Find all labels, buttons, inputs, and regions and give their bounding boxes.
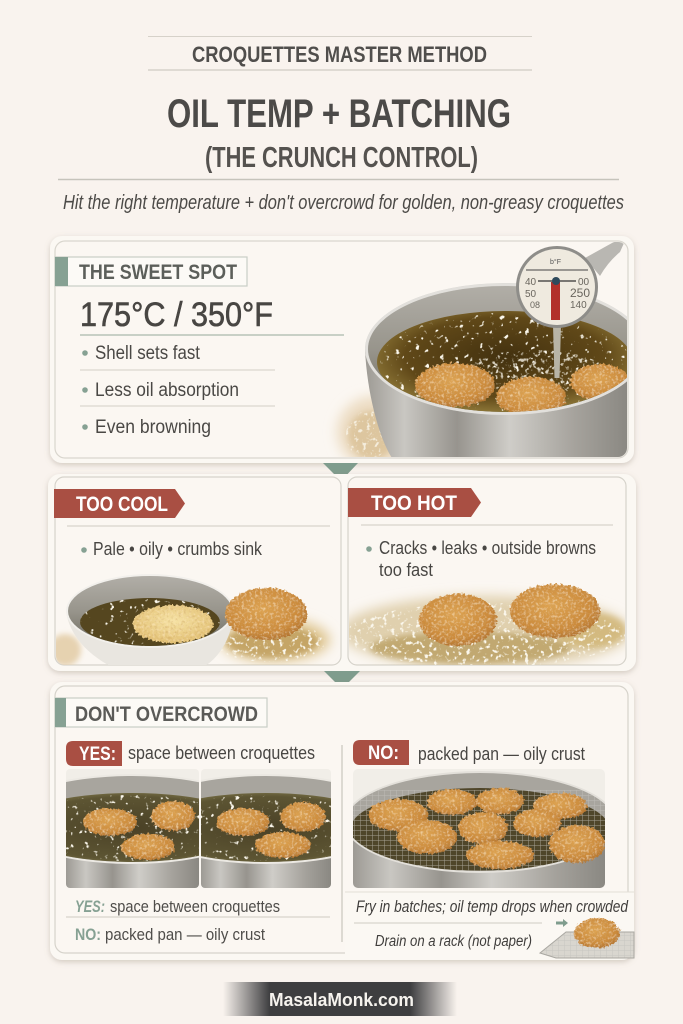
too hot tag: TOO HOT (371, 492, 457, 515)
too cool tag (54, 489, 185, 518)
temperature: 175°C / 350°F (80, 296, 273, 334)
panel: too cool and too hot (48, 474, 636, 671)
heading tag: don't overcrowd (55, 698, 267, 727)
too hot text (366, 538, 596, 580)
no label (353, 740, 585, 765)
bullet list: Shell sets fast (95, 343, 201, 364)
no label: NO: (368, 743, 399, 764)
photo: spaced pan one (66, 769, 199, 888)
caption: yes and no: packed pan — oily crust (105, 925, 265, 944)
thermometer: 50 (525, 289, 537, 300)
illustration: cracked croquettes (340, 584, 630, 668)
photo: packed pan on rack (344, 769, 616, 888)
photo: spaced pan two (201, 769, 331, 888)
heading tag: the sweet spot (55, 257, 247, 286)
panel: too hot (340, 477, 630, 668)
panel: don't overcrowd (1, 682, 634, 960)
kicker heading: CROQUETTES MASTER METHOD (192, 42, 487, 67)
icon: arrow (556, 919, 568, 927)
too cool tag: TOO COOL (76, 493, 168, 516)
bullet list: Even browning (95, 417, 211, 438)
arrow down (324, 671, 360, 689)
panel: the sweet spot (50, 236, 645, 468)
thermometer: 08 (530, 300, 540, 310)
thermometer: 40 (525, 277, 537, 288)
no label: packed pan — oily crust (418, 744, 585, 764)
too cool text: Pale • oily • crumbs sink (93, 539, 263, 559)
heading tag: don't overcrowd: DON'T OVERCROWD (75, 703, 258, 726)
illustration: pan with thermometer (337, 242, 645, 468)
illustration: croquettes in bowl (49, 574, 330, 666)
bullet list: Less oil absorption (95, 380, 239, 401)
too hot text: Cracks • leaks • outside browns (379, 538, 596, 558)
tip box: batches and draining: Drain on a rack (not paper) (375, 933, 532, 950)
footer badge: MasalaMonk.com (269, 990, 414, 1010)
tip box: batches and draining (345, 892, 634, 958)
thermometer: 250 (570, 286, 590, 300)
caption: yes and no: space between croquettes (110, 898, 280, 916)
title: OIL TEMP + BATCHING (167, 92, 511, 136)
caption: yes and no: YES: (75, 897, 105, 916)
title (58, 92, 619, 180)
thermometer: 00 (578, 277, 590, 288)
too hot tag (348, 488, 481, 517)
title: (THE CRUNCH CONTROL) (205, 142, 478, 174)
yes label: YES: (79, 744, 116, 765)
thermometer: b°F (550, 258, 561, 266)
icon: croquette on rack (540, 918, 634, 958)
panel: too cool (49, 477, 341, 666)
caption: yes and no (66, 897, 330, 944)
heading tag: the sweet spot: THE SWEET SPOT (79, 261, 237, 284)
too hot text: too fast (379, 560, 433, 580)
thermometer: 140 (570, 300, 587, 311)
thermometer (516, 242, 624, 378)
yes label: space between croquettes (128, 743, 315, 763)
yes label (66, 741, 315, 766)
bullet list (80, 343, 275, 438)
footer badge (223, 982, 457, 1016)
arrow down (323, 463, 358, 481)
caption: yes and no: NO: (75, 925, 101, 944)
